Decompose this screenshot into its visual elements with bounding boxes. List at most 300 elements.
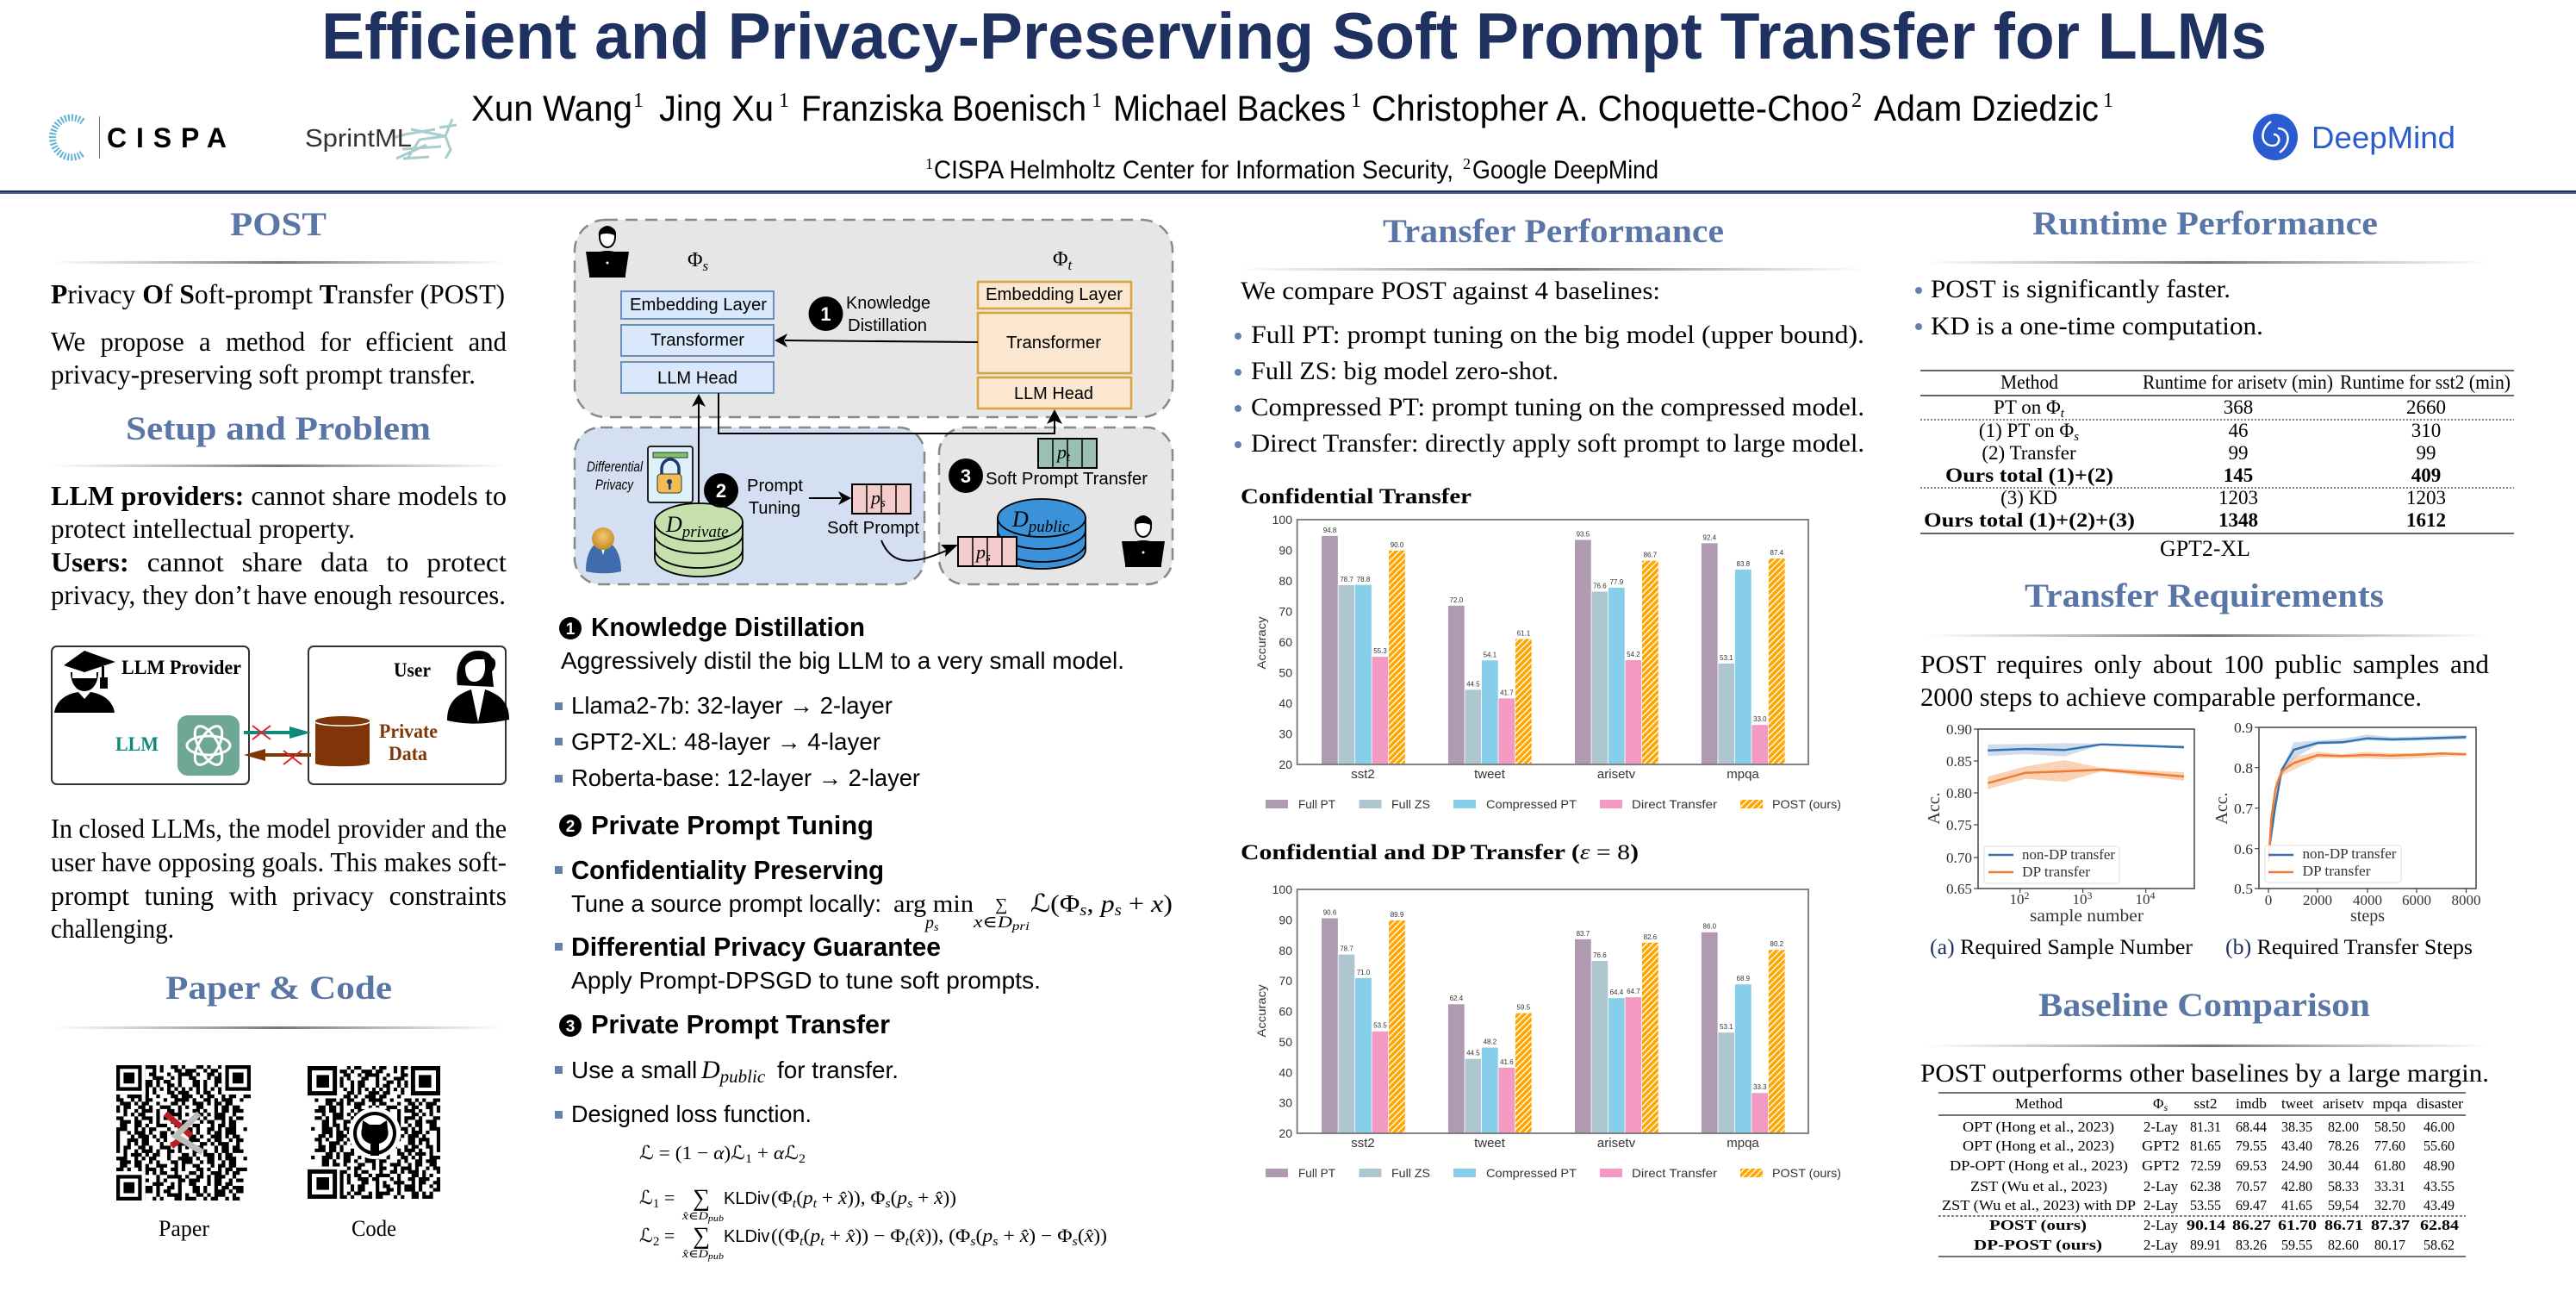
table row: POST	[1989, 1217, 2460, 1233]
table row: OPT GPT2: OPT (Hong et al., 2023)	[1963, 1138, 2114, 1154]
item: differential privacy guarantee: Differential Privacy Guarantee	[571, 932, 941, 962]
legend: Full PT	[1298, 797, 1335, 811]
x axis labels: arisetv	[1597, 1136, 1636, 1151]
table header	[2015, 1095, 2463, 1113]
icon: provider with laptop	[1122, 516, 1165, 567]
item: differential privacy guarantee: Apply Prompt-DPSGD to tune soft prompts.	[571, 967, 1041, 994]
label: private data: Data	[389, 743, 427, 764]
y ticks: 0.90	[1946, 721, 1972, 738]
formula: argmin: ∑	[995, 895, 1007, 914]
item: public data: for transfer.	[777, 1057, 899, 1083]
heading: confidential and DP transfer: Confidential and DP Transfer ( ε = 8 )	[1241, 841, 1639, 864]
legend	[1984, 846, 2119, 883]
value labels: 53.1	[1720, 1023, 1733, 1031]
x axis labels: mpqa	[1727, 767, 1759, 782]
table row: OPT GPT2: 79.55	[2236, 1138, 2267, 1154]
value labels: 64.7	[1627, 988, 1640, 995]
table row: ZST with DP: 59,54	[2328, 1197, 2359, 1213]
formula: L2: pub	[707, 1252, 724, 1262]
curved arrow	[881, 540, 958, 561]
x axis labels: sst2	[1351, 767, 1375, 782]
y ticks: 0.9	[2234, 720, 2253, 736]
logo: DeepMind	[2253, 114, 2455, 160]
formula: L2: 2	[653, 1235, 659, 1249]
value labels: 44.5	[1466, 681, 1480, 688]
label: knowledge distillation: Distillation	[848, 316, 927, 335]
affiliations: CISPA Helmholtz Center for Information Security,	[934, 156, 1453, 184]
y axis label: Accuracy	[1254, 617, 1268, 669]
table row: OPT GPT2	[1963, 1138, 2455, 1154]
affiliations: Google DeepMind	[1472, 156, 1658, 184]
step 2 badge	[704, 473, 738, 508]
table header: imdb	[2236, 1095, 2267, 1112]
panel: runtime performance	[1915, 205, 2514, 561]
legend: Direct Transfer	[1632, 797, 1717, 811]
y ticks	[1946, 721, 1972, 897]
value labels: 78.7	[1340, 576, 1353, 583]
y axis ticks: 20	[1279, 758, 1292, 771]
arrow: data blocked	[244, 749, 311, 764]
table: runtime: Runtime for arisetv (min)	[2143, 371, 2333, 393]
formula: L2: x̂))	[1085, 1225, 1106, 1246]
table row: ZST with DP: 32.70	[2374, 1197, 2405, 1213]
y ticks: 0.70	[1946, 850, 1972, 866]
item: confidentiality preserving: Tune a source prompt locally:	[571, 890, 881, 917]
database: D private	[655, 503, 743, 577]
table row: POST: 86.27	[2232, 1217, 2272, 1233]
formula: argmin: arg min	[893, 890, 974, 918]
closed LLM paragraph	[51, 813, 507, 944]
y axis ticks: 30	[1279, 727, 1292, 741]
axes frame	[1297, 520, 1808, 764]
arrow: LLM blocked	[244, 726, 311, 739]
caption: required sample number: (a) Required Sample Number	[1930, 936, 2193, 959]
item: loss function: Designed loss function.	[571, 1101, 812, 1127]
caption: Paper: Paper	[159, 1216, 209, 1241]
table row: ZST with DP: 43.49	[2424, 1197, 2455, 1213]
formula: argmin: s	[1115, 901, 1122, 920]
x ticks	[2265, 892, 2481, 908]
problem statement: privacy, they don’t have enough resources.	[51, 579, 506, 610]
y ticks: 0.7	[2234, 801, 2254, 817]
y axis ticks: 70	[1279, 605, 1292, 619]
x ticks: 10	[2009, 891, 2025, 907]
legend: Full PT	[1298, 1166, 1335, 1180]
bullets: runtime: POST is significantly faster.	[1931, 275, 2231, 303]
formula: L1: t	[813, 1197, 818, 1211]
formula: argmin: x∈D	[974, 914, 1005, 932]
authors: 1	[1092, 90, 1102, 112]
value labels: 78.8	[1357, 576, 1371, 583]
step 1 badge	[808, 296, 843, 331]
step 1 badge: 1	[820, 303, 831, 325]
authors: Xun Wang	[471, 88, 632, 128]
value labels: 71.0	[1357, 969, 1371, 976]
label: phi t: Φ	[1053, 248, 1068, 271]
formula: argmin	[893, 890, 1173, 934]
table header: Method	[2015, 1095, 2063, 1112]
formula: L2: x̂∈D	[682, 1247, 704, 1260]
logo: SprintML: SprintML	[305, 125, 412, 153]
authors: Adam Dziedzic	[1874, 88, 2099, 128]
table row: DP-OPT	[1950, 1157, 2455, 1174]
problem statement: LLM providers: cannot share models to	[51, 480, 507, 511]
x axis labels	[1351, 1136, 1759, 1151]
legend	[1266, 797, 1841, 811]
table row: DP-POST	[1974, 1237, 2455, 1253]
bar chart: confidential and DP transfer	[1254, 882, 1841, 1180]
table: runtime: (3) KD	[2000, 487, 2057, 508]
line chart: required sample number	[1925, 721, 2194, 926]
heading: runtime performance: Runtime Performance	[2032, 205, 2378, 242]
legend: non-DP transfer	[2022, 846, 2115, 863]
table: runtime: Ours total (1)+(2)+(3)	[1924, 509, 2135, 531]
formula: L1: +	[817, 1187, 838, 1208]
database: D public: public	[1027, 518, 1070, 536]
line chart: required transfer steps: Acc.	[2212, 792, 2231, 825]
value labels: 59.5	[1517, 1003, 1531, 1012]
affiliations: 2	[1463, 155, 1471, 172]
table row: OPT GPT2: GPT2	[2142, 1138, 2180, 1154]
legend: Compressed PT	[1486, 797, 1577, 811]
label: differential privacy: Differential	[587, 458, 644, 475]
problem statement	[51, 480, 507, 610]
x ticks	[2009, 889, 2156, 907]
label: private data: Private	[379, 720, 438, 742]
table row: DP-OPT: 72.59	[2190, 1157, 2221, 1174]
authors: Christopher A. Choquette-Choo	[1372, 88, 1849, 128]
table: runtime: Method	[2000, 371, 2058, 393]
value labels: 61.1	[1517, 629, 1531, 638]
y ticks: 0.85	[1946, 753, 1972, 770]
table: runtime: 145	[2224, 465, 2253, 486]
table row: POST: 86.71	[2324, 1217, 2363, 1233]
table: baselines	[1938, 1093, 2466, 1257]
database: D public	[998, 499, 1086, 569]
x ticks: 8000	[2452, 892, 2481, 908]
table header: sst2	[2193, 1095, 2218, 1112]
text: requirements	[1920, 649, 2490, 712]
panel: transfer requirements	[1920, 577, 2490, 959]
step 3 badge	[949, 458, 983, 493]
formula: L1: s	[907, 1197, 912, 1211]
y axis ticks: 60	[1279, 635, 1292, 649]
table row: DP-POST: 2-Lay	[2144, 1237, 2178, 1253]
legend: non-DP transfer	[2302, 845, 2397, 862]
heading: confidential transfer: Confidential Transfer	[1241, 485, 1472, 508]
formula: L2: +	[824, 1225, 846, 1246]
title: Efficient and Privacy-Preserving Soft Prompt Transfer for LLMs	[321, 0, 2267, 73]
formula: L1: ∑	[693, 1185, 710, 1212]
source model stack	[621, 291, 774, 393]
target model stack	[978, 282, 1131, 409]
value labels: 86.0	[1703, 922, 1717, 931]
label: phi s: s	[703, 258, 709, 274]
formula: L2: ℒ	[639, 1225, 653, 1246]
table: runtime	[1920, 371, 2514, 533]
value labels	[1323, 908, 1784, 1091]
icon: DP lock document	[648, 446, 693, 502]
table row: DP-OPT: 48.90	[2424, 1157, 2455, 1174]
formula: argmin: x)	[1151, 890, 1172, 918]
value labels: 83.7	[1577, 930, 1590, 938]
y axis ticks: 100	[1272, 513, 1292, 527]
y axis ticks: 40	[1279, 1065, 1292, 1079]
x axis labels: tweet	[1474, 1136, 1506, 1151]
bullets: layer compression: Llama2-7b: 32-layer → 2-layer	[571, 692, 893, 719]
formula: L1: x̂))	[934, 1187, 955, 1208]
legend: Full ZS	[1391, 797, 1430, 811]
soft prompt ps: s	[880, 496, 886, 510]
legend: POST (ours)	[1772, 1166, 1841, 1180]
y ticks: 0.80	[1946, 785, 1972, 801]
item: public data: D	[701, 1056, 720, 1084]
soft prompt ps	[852, 484, 911, 514]
y ticks	[2234, 720, 2254, 897]
table row: ZST: 33.31	[2374, 1178, 2405, 1194]
value labels: 64.4	[1610, 989, 1624, 996]
table row: DP-POST: 89.91	[2190, 1237, 2221, 1253]
table: runtime: t	[2061, 407, 2065, 421]
table: runtime: 2660	[2406, 396, 2446, 418]
table row: POST: 62.84	[2420, 1217, 2460, 1233]
formula: L1: =	[659, 1187, 675, 1208]
diagram: POST pipeline	[575, 220, 1173, 584]
heading: paper and code: Paper & Code	[165, 970, 392, 1007]
icon: data cylinder	[315, 716, 370, 766]
target model stack: LLM Head	[1014, 384, 1093, 403]
target model stack: Embedding Layer	[986, 285, 1123, 304]
table: runtime: Runtime for sst2 (min)	[2340, 371, 2511, 393]
panel: paper and code	[53, 970, 503, 1241]
icon: graduate	[54, 651, 115, 713]
panel: model provider	[575, 220, 1173, 417]
value labels: 54.2	[1627, 651, 1640, 658]
axes frame	[1297, 889, 1808, 1133]
label: differential privacy: Privacy	[595, 477, 634, 493]
authors	[471, 88, 2113, 128]
formula: total loss: αℒ	[774, 1142, 798, 1163]
table: runtime: 99	[2228, 442, 2249, 464]
value labels: 80.2	[1770, 940, 1784, 948]
table row: ZST with DP	[1942, 1197, 2455, 1213]
x ticks: 4000	[2353, 892, 2382, 908]
y axis ticks: 50	[1279, 665, 1292, 679]
diagram: provider and user	[52, 646, 509, 784]
table: runtime: 46	[2228, 420, 2249, 441]
y ticks: 0.75	[1946, 817, 1972, 833]
value labels: 54.1	[1484, 652, 1497, 658]
label: phi s: Φ	[688, 249, 703, 271]
heading: private prompt tuning: 2	[566, 818, 575, 836]
table row: OPT GPT2: 78.26	[2328, 1138, 2359, 1154]
value labels: 94.8	[1323, 527, 1337, 534]
authors: 1	[2103, 90, 2113, 112]
table row: ZST: 58.33	[2328, 1178, 2359, 1194]
heading: baseline comparison: Baseline Comparison	[2038, 987, 2370, 1024]
table row: OPT 2-Lay: 38.35	[2281, 1119, 2312, 1135]
icon: user with laptop	[586, 227, 629, 278]
formula: L1: x̂)), Φ	[838, 1187, 883, 1208]
value labels: 48.2	[1484, 1038, 1497, 1046]
x axis labels: tweet	[1474, 767, 1506, 782]
value labels: 76.6	[1593, 583, 1607, 589]
formula: total loss: +	[752, 1142, 774, 1163]
table row: ZST with DP: ZST (Wu et al., 2023) with DP	[1942, 1197, 2136, 1213]
table header: disaster	[2417, 1095, 2463, 1112]
logo: SprintML	[305, 119, 457, 159]
authors: 1	[1351, 90, 1361, 112]
y axis ticks: 50	[1279, 1035, 1292, 1049]
database: D private: private	[681, 523, 729, 541]
table: runtime: PT on Φ	[1994, 396, 2061, 418]
bullets: runtime	[1915, 275, 2263, 340]
formula: L1: s	[885, 1197, 891, 1211]
table row: DP-OPT: 61.80	[2374, 1157, 2405, 1174]
table: runtime: 1203	[2406, 487, 2446, 508]
table row: ZST with DP: 53.55	[2190, 1197, 2221, 1213]
table row: DP-OPT: 30.44	[2328, 1157, 2359, 1174]
value labels: 41.6	[1500, 1058, 1514, 1066]
formula: L2: KLDiv	[724, 1227, 769, 1246]
table row: OPT GPT2: 43.40	[2281, 1138, 2312, 1154]
table: runtime: (1) PT on Φ	[1979, 420, 2074, 441]
table: runtime: 409	[2411, 465, 2441, 486]
table: runtime: 99	[2416, 442, 2436, 464]
soft prompt ps on public data: s	[986, 551, 991, 564]
formula: L2: s	[1073, 1235, 1078, 1249]
bullets: layer compression	[555, 692, 920, 791]
table row: ZST: 2-Lay	[2144, 1178, 2178, 1194]
item: public data	[555, 1056, 899, 1087]
icon: woman	[447, 651, 509, 724]
diagram: provider and user: User	[394, 659, 431, 681]
formula: L2: (	[976, 1225, 982, 1246]
formula: L1: +	[912, 1187, 934, 1208]
authors: 2	[1851, 90, 1862, 112]
legend: Full ZS	[1391, 1166, 1430, 1180]
QR code: paper	[105, 1065, 254, 1201]
table row: POST: 90.14	[2187, 1217, 2226, 1233]
line chart: required sample number: Acc.	[1925, 792, 1944, 825]
table row: OPT 2-Lay	[1963, 1119, 2455, 1135]
formula: L2: t	[800, 1235, 804, 1249]
table row: OPT 2-Lay: OPT (Hong et al., 2023)	[1963, 1119, 2114, 1135]
formula: L1: t	[793, 1197, 797, 1211]
formula: L1	[639, 1185, 956, 1224]
formula: L2: x̂)), (Φ	[916, 1225, 968, 1246]
formula: L2: =	[659, 1225, 675, 1246]
icon: ChatGPT	[177, 715, 240, 776]
table row: OPT 2-Lay: 68.44	[2236, 1119, 2267, 1135]
x ticks: 6000	[2402, 892, 2431, 908]
label: private data	[379, 720, 438, 764]
authors: Michael Backes	[1113, 88, 1346, 128]
panel: transfer performance	[1235, 213, 1865, 1180]
bullets: layer compression: Roberta-base: 12-layer → 2-layer	[571, 764, 920, 791]
x ticks: 0	[2265, 892, 2272, 908]
arrow: route to target	[719, 393, 1062, 433]
database: D public: D	[1012, 507, 1029, 532]
label: knowledge distillation: Knowledge	[846, 294, 930, 313]
formula: total loss: 2	[799, 1152, 806, 1166]
y axis ticks: 20	[1279, 1126, 1292, 1140]
y axis ticks: 40	[1279, 696, 1292, 710]
formula: L2: (	[804, 1225, 810, 1246]
x axis labels: arisetv	[1597, 767, 1636, 782]
heading: transfer requirements: Transfer Requirements	[2025, 577, 2384, 614]
formula: argmin: ,	[1087, 890, 1101, 918]
table row: DP-POST: 59.55	[2281, 1237, 2312, 1253]
authors: 1	[633, 90, 644, 112]
table row: POST: 87.37	[2371, 1217, 2411, 1233]
table row: DP-POST: 82.60	[2328, 1237, 2359, 1253]
POST description: privacy-preserving soft prompt transfer.	[51, 359, 476, 390]
formula: L2: t	[820, 1235, 825, 1249]
table row: OPT 2-Lay: 2-Lay	[2144, 1119, 2178, 1135]
table row: OPT 2-Lay: 58.50	[2374, 1119, 2405, 1135]
caption: required transfer steps: (b) Required Transfer Steps	[2225, 936, 2473, 959]
table row: OPT 2-Lay: 82.00	[2328, 1119, 2359, 1135]
formula: L1: p	[895, 1187, 907, 1208]
bullets: baselines: Direct Transfer: directly apply soft prompt to large model.	[1251, 429, 1864, 458]
QR code: code	[304, 1066, 451, 1199]
bars	[1322, 536, 1785, 764]
formula: argmin: s	[934, 921, 939, 934]
item: confidentiality preserving: Confidentiality Preserving	[571, 855, 884, 885]
label: knowledge distillation	[846, 294, 930, 335]
icon: user blue suit	[586, 527, 621, 573]
axis labels: steps	[2350, 907, 2385, 926]
heading: setup and problem: Setup and Problem	[126, 410, 431, 447]
table row: ZST: 42.80	[2281, 1178, 2312, 1194]
item: public data: public	[719, 1066, 766, 1087]
value labels: 90.0	[1391, 541, 1404, 549]
label: LLM: LLM	[115, 733, 159, 755]
formula: L2: t	[905, 1235, 910, 1249]
formula: argmin: s	[1080, 901, 1087, 920]
bullets: baselines: Full ZS: big model zero-shot.	[1251, 357, 1559, 385]
legend: DP transfer	[2302, 863, 2371, 879]
text: distillation summary: Aggressively distil the big LLM to a very small model.	[561, 647, 1124, 674]
problem statement: Users: cannot share data to protect	[51, 546, 507, 577]
text: requirements: 2000 steps to achieve comparable performance.	[1920, 682, 2422, 712]
x ticks: 2000	[2303, 892, 2332, 908]
table row: ZST	[1970, 1178, 2455, 1194]
table row: DP-POST: DP-POST (ours)	[1974, 1237, 2102, 1253]
value labels: 93.5	[1577, 531, 1590, 538]
table row: OPT 2-Lay: 81.31	[2190, 1119, 2221, 1135]
formula: argmin: p	[925, 914, 934, 932]
table row: ZST with DP: 2-Lay	[2144, 1197, 2178, 1213]
authors: 1	[779, 90, 789, 112]
value labels: 68.9	[1737, 975, 1751, 982]
table row: POST: 61.70	[2278, 1217, 2317, 1233]
soft prompt ps: p	[871, 487, 880, 508]
header rule	[0, 190, 2576, 194]
database: D private: D	[666, 512, 682, 537]
closed LLM paragraph: In closed LLMs, the model provider and the	[51, 813, 507, 844]
authors: Franziska Boenisch	[801, 88, 1086, 128]
x ticks: 10	[2135, 891, 2150, 907]
x ticks: 10	[2073, 891, 2087, 907]
value labels: 44.5	[1466, 1050, 1480, 1057]
POST description: We propose a method for efficient and	[51, 326, 507, 357]
panel: private user	[575, 427, 924, 584]
formula: L2: s	[970, 1235, 976, 1249]
table header: tweet	[2281, 1095, 2313, 1112]
soft prompt pt	[1038, 439, 1097, 468]
